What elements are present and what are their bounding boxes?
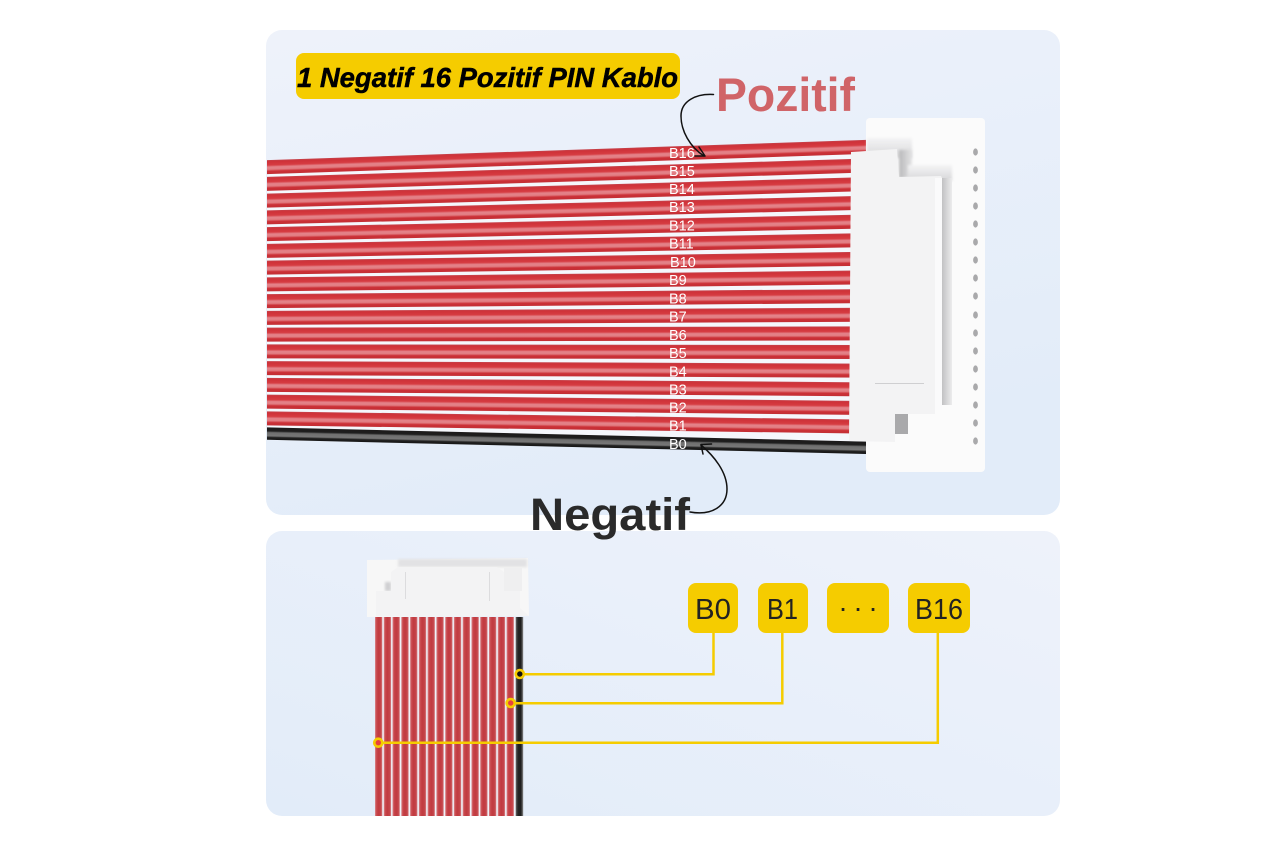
wire labels B16 to B0: B10: [670, 255, 696, 271]
wire labels B16 to B0: B9: [669, 273, 687, 289]
wire labels B16 to B0: B5: [669, 346, 687, 362]
badge: B1: [758, 583, 808, 633]
wire labels B16 to B0: B14: [669, 182, 695, 198]
marker: B16 wire: [374, 739, 382, 747]
wire labels B16 to B0: B8: [669, 292, 687, 308]
arrow: Negatif to B0: [690, 444, 727, 513]
marker: B1 wire: [507, 699, 515, 707]
wire labels B16 to B0: B15: [669, 164, 695, 180]
wire labels B16 to B0: B13: [669, 200, 695, 216]
wire labels B16 to B0: B1: [669, 418, 687, 434]
heading: Pozitif: Pozitif: [716, 68, 855, 121]
leader lines: [378, 630, 938, 743]
badge: B0: [688, 583, 738, 633]
title badge: 1 Negatif 16 Pozitif PIN Kablo: [297, 62, 678, 93]
wire labels B16 to B0: B3: [669, 382, 687, 398]
badge: ellipsis: [827, 583, 889, 633]
connector: front view: [367, 558, 529, 617]
badge: B0: B0: [695, 594, 731, 626]
wire bundle: front view: [375, 617, 523, 816]
badge: B1: B1: [767, 594, 798, 626]
connector pin holes: [973, 148, 978, 445]
title badge: [296, 53, 680, 99]
wire labels B16 to B0: B7: [669, 310, 687, 326]
wire labels B16 to B0: B11: [669, 236, 694, 252]
wire labels B16 to B0: B4: [669, 364, 687, 380]
marker: B0 wire: [516, 670, 524, 678]
wire labels B16 to B0: B12: [669, 218, 695, 234]
panel: bottom wiring diagram: [266, 531, 1060, 816]
badge: ellipsis: ···: [838, 592, 878, 623]
badge: B16: B16: [915, 594, 963, 626]
wire labels B16 to B0: B16: [669, 146, 695, 162]
wire labels B16 to B0: B0: [669, 437, 687, 453]
wire labels B16 to B0: B2: [669, 400, 687, 416]
wire labels B16 to B0: B6: [669, 328, 687, 344]
connector: side view: [849, 118, 985, 472]
heading: Negatif: Negatif: [530, 489, 691, 540]
badge: B16: [908, 583, 970, 633]
wire labels B16 to B0: [669, 146, 696, 453]
wire bundle: side view: [267, 140, 866, 454]
arrow: Pozitif to B16: [681, 94, 714, 156]
panel: top cable photo: [266, 30, 1060, 515]
